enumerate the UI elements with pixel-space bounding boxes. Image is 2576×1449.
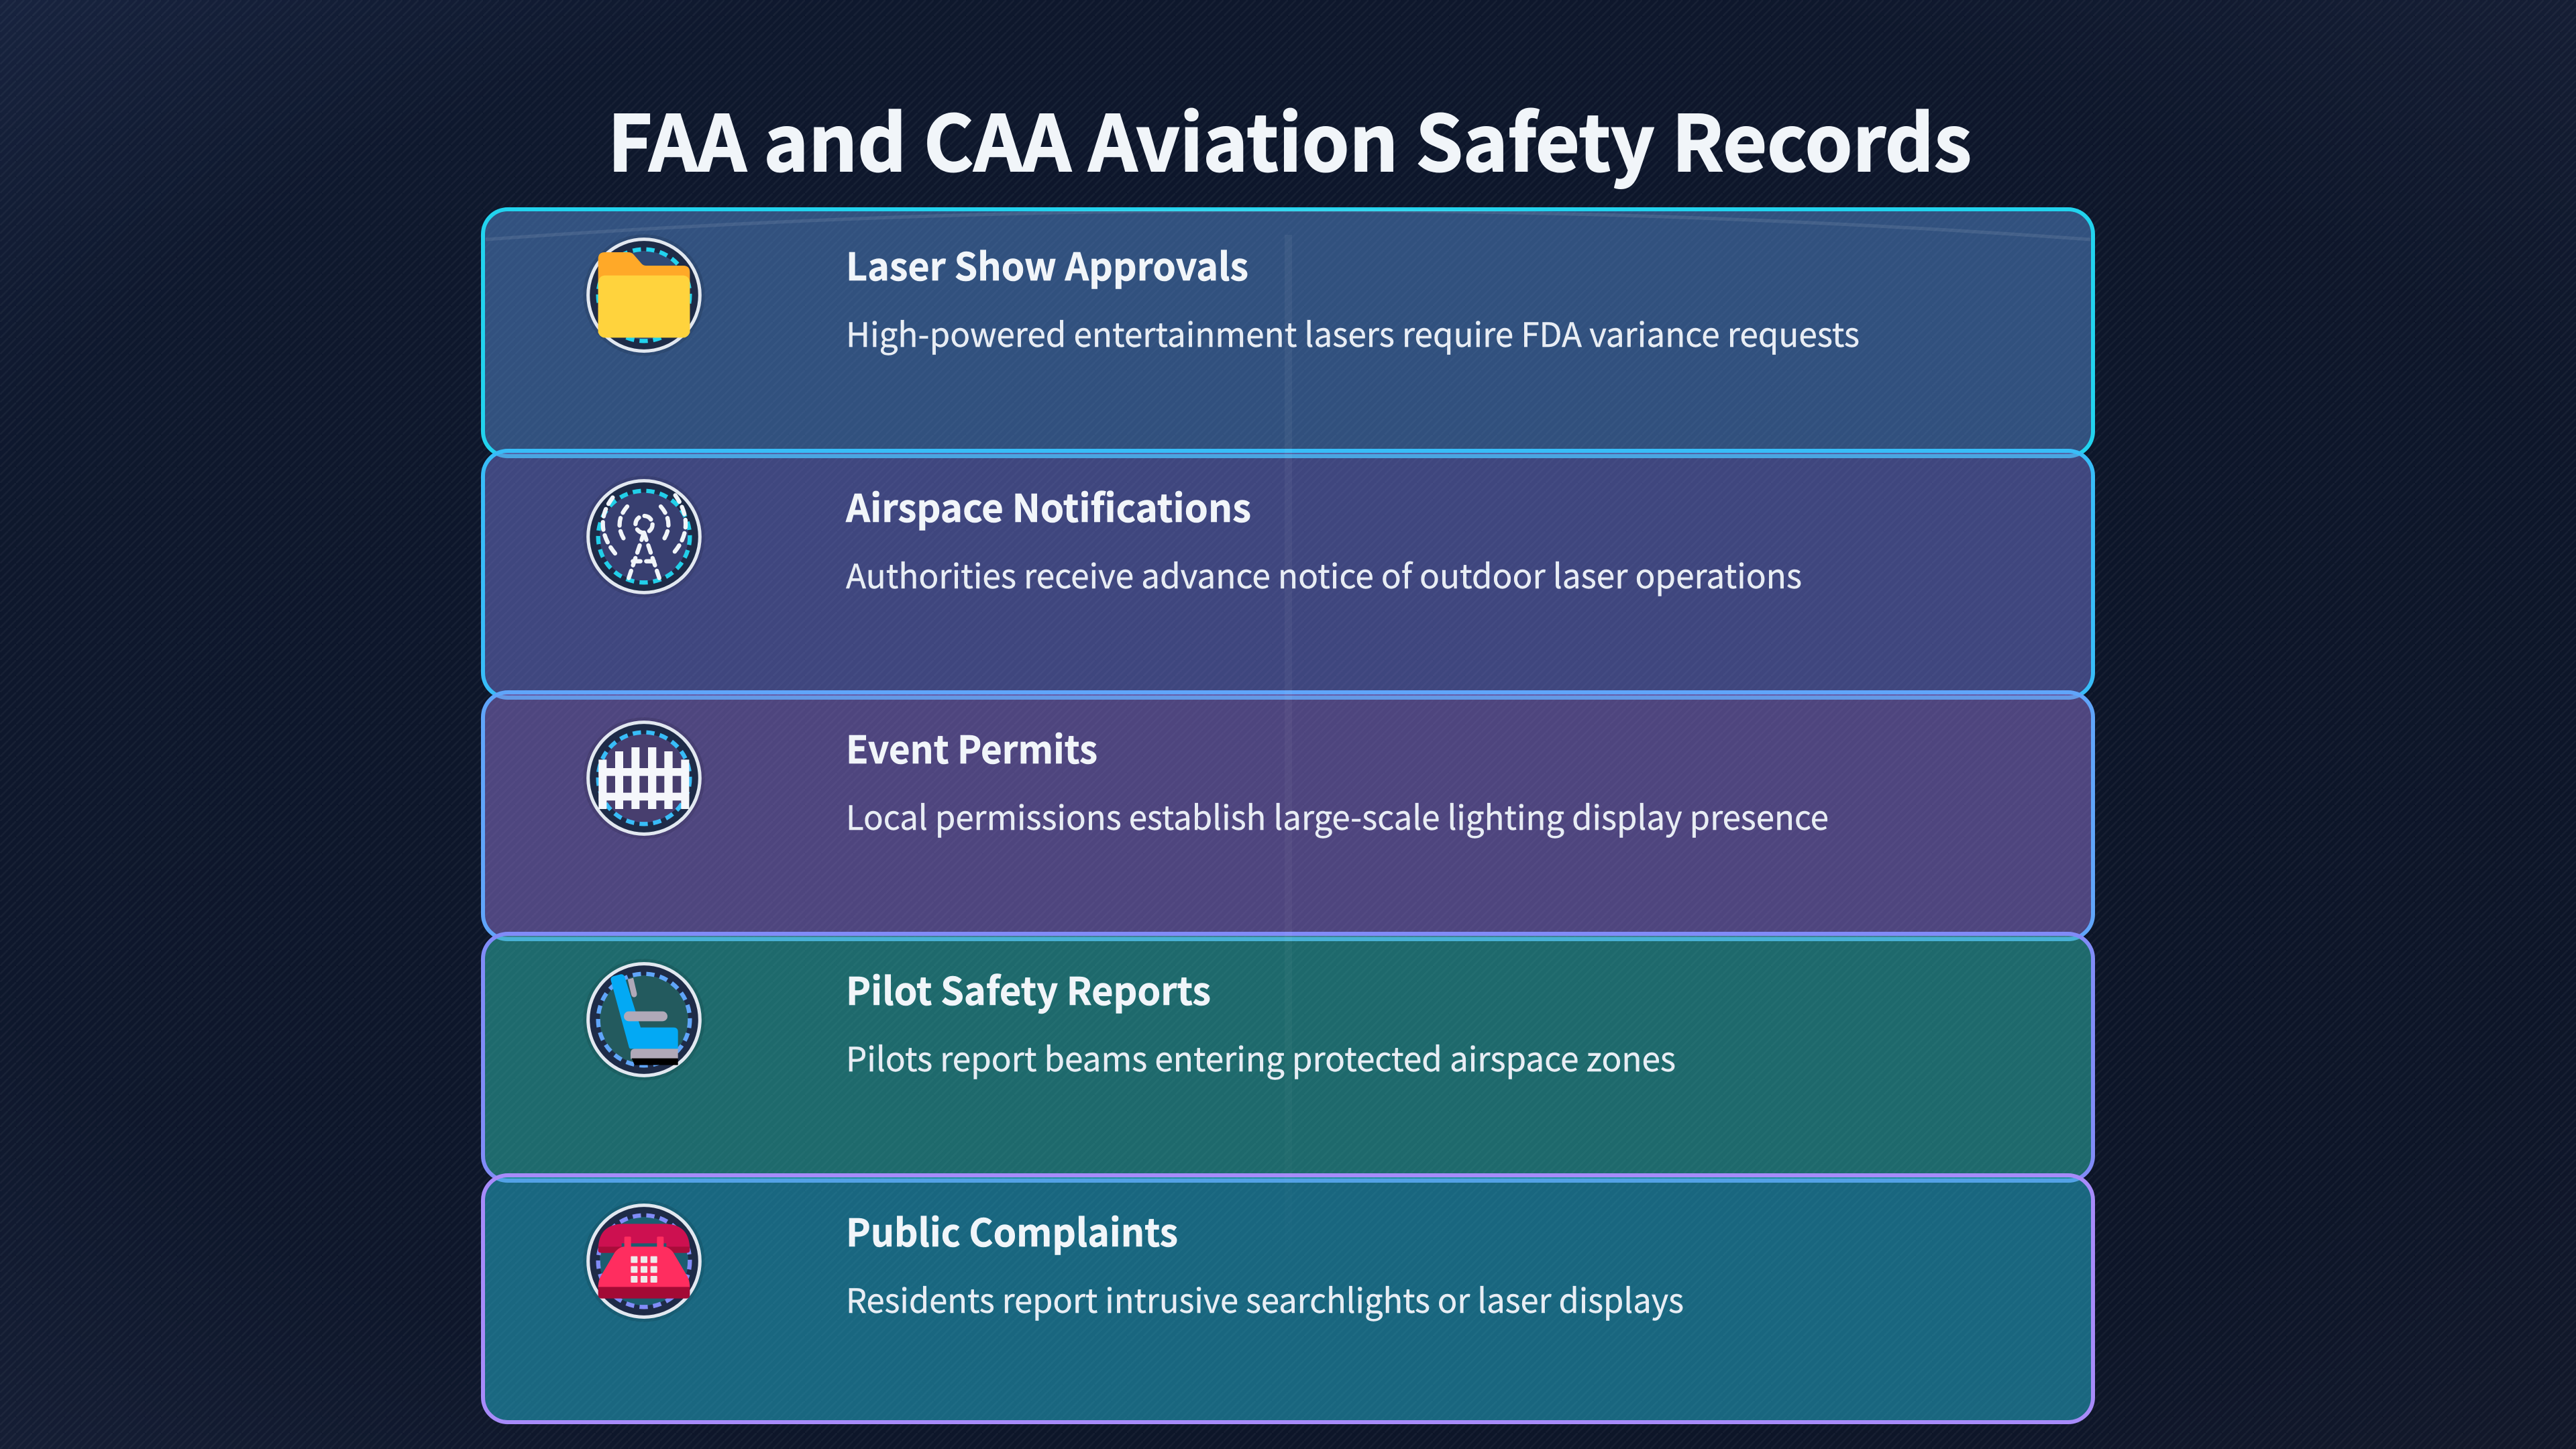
icon: folder	[583, 234, 705, 356]
card 1 background	[483, 209, 2093, 456]
panel: Pilot Safety Reports	[483, 934, 2093, 1181]
card 2 background	[483, 451, 2093, 698]
panel: Public Complaints	[483, 1175, 2093, 1422]
description: Authorities receive advance notice of outdoor laser operations	[846, 550, 1802, 598]
card 5 background	[483, 1175, 2093, 1422]
heading: Pilot Safety Reports	[846, 961, 1211, 1016]
card 4 background	[483, 934, 2093, 1181]
description: Residents report intrusive searchlights or laser displays	[846, 1275, 1684, 1323]
panel: Laser Show Approvals	[483, 209, 2093, 456]
icon: fence	[583, 717, 705, 839]
heading: Public Complaints	[846, 1203, 1178, 1258]
card 3 background	[483, 692, 2093, 939]
heading: Event Permits	[846, 720, 1097, 775]
panel: Event Permits	[483, 692, 2093, 939]
description: Pilots report beams entering protected airspace zones	[846, 1033, 1676, 1081]
description: Local permissions establish large-scale lighting display presence	[846, 792, 1829, 840]
icon: aircraft seat	[583, 959, 705, 1081]
panel: Airspace Notifications	[483, 451, 2093, 698]
title: FAA and CAA Aviation Safety Records	[608, 83, 1972, 194]
heading: Laser Show Approvals	[846, 237, 1248, 292]
heading: Airspace Notifications	[845, 478, 1251, 533]
description: High-powered entertainment lasers require FDA variance requests	[846, 309, 1860, 357]
icon: radio tower	[583, 476, 705, 598]
icon: telephone	[583, 1200, 705, 1322]
